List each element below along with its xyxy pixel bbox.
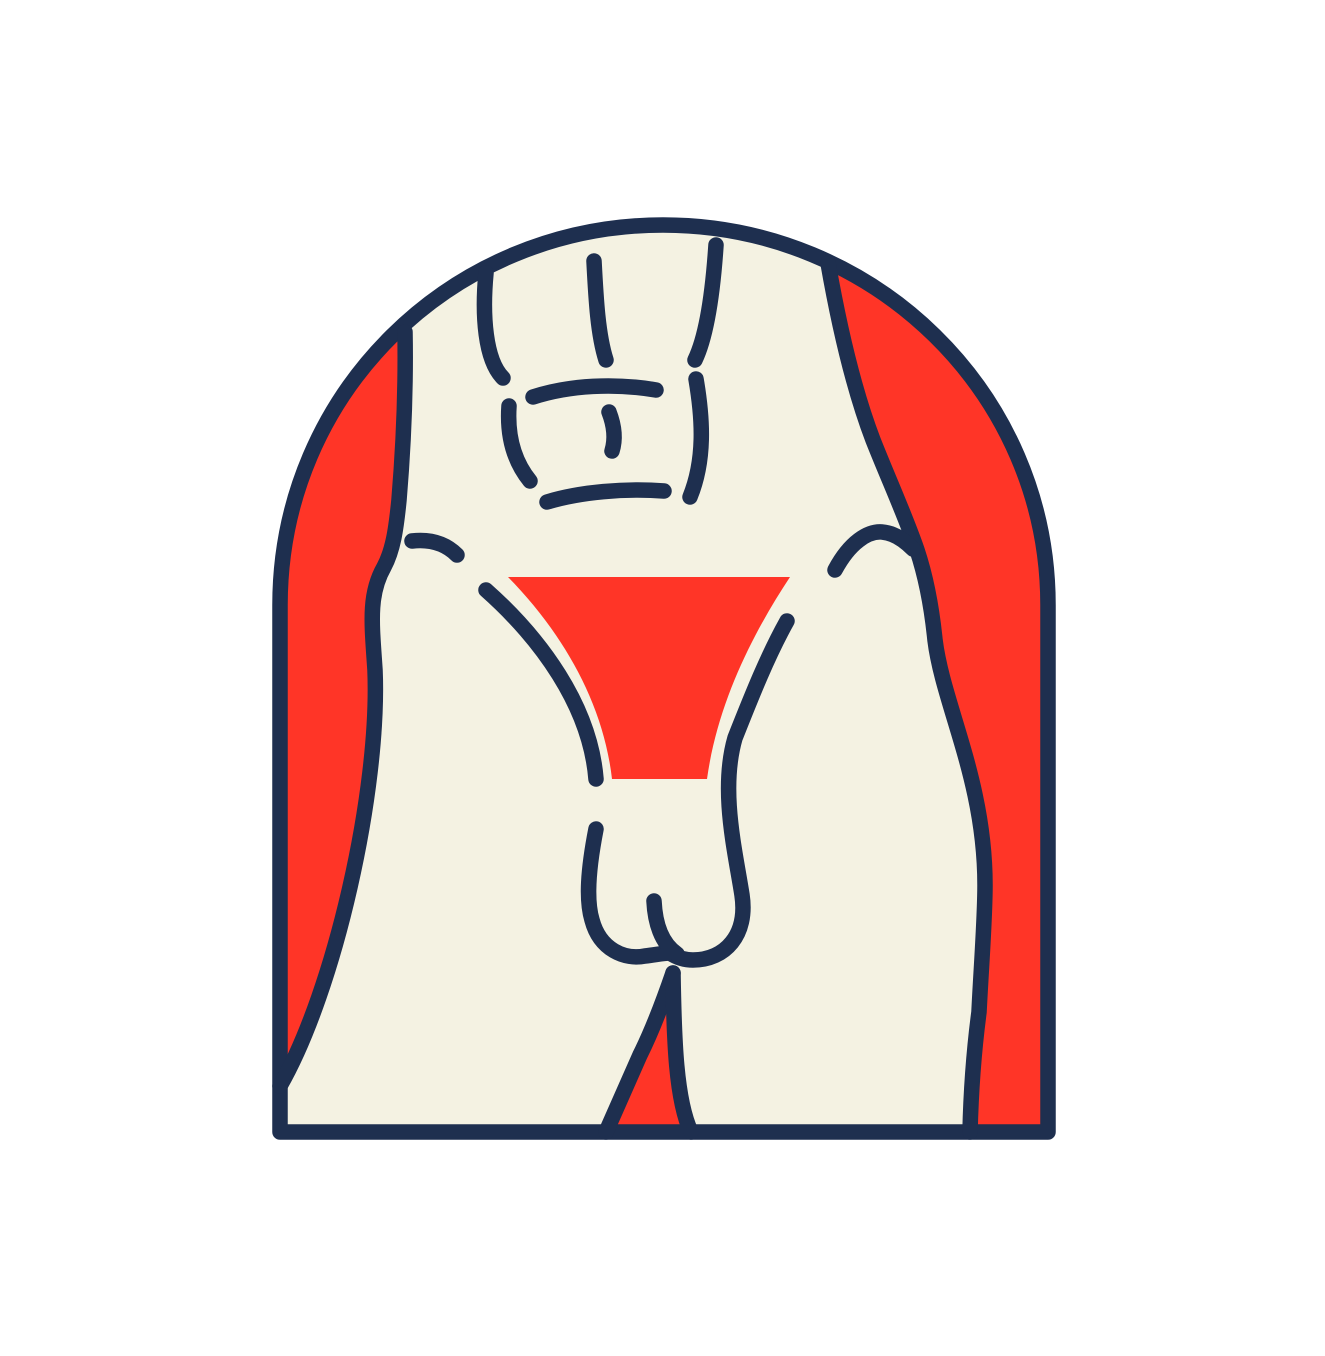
line work: [280, 225, 1048, 1132]
inner thigh: [606, 973, 673, 1132]
red trapezoid: [508, 577, 790, 779]
groin lines: [486, 590, 596, 779]
arch outline: [280, 225, 1048, 1132]
pouch: [589, 829, 670, 957]
arch background: [280, 225, 1048, 1132]
left body contour: [280, 332, 405, 1086]
red gap between legs: [618, 1012, 680, 1126]
body fill: [280, 232, 985, 1132]
right body contour: [828, 263, 985, 1132]
hip creases: [412, 541, 457, 555]
fist lines: [484, 273, 503, 378]
